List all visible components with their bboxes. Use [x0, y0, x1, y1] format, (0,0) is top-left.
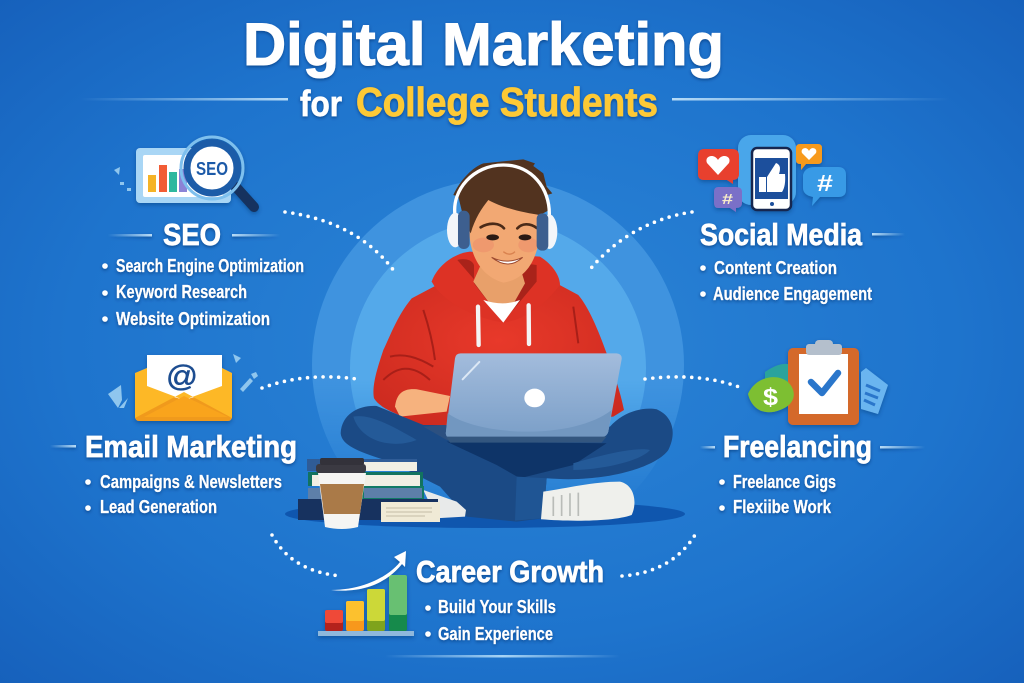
title: for [300, 83, 342, 124]
title: Digital Marketing [243, 11, 724, 78]
section: freelancing: Freelancing [723, 429, 872, 464]
icon: email envelope: @ [166, 360, 198, 393]
arm [395, 389, 450, 417]
drawstrings [478, 305, 529, 345]
section: SEO: Keyword Research [116, 282, 247, 302]
section: career growth: Career Growth [416, 554, 604, 589]
face [469, 199, 541, 283]
section: SEO [102, 217, 304, 329]
section: career growth: Build Your Skills [438, 597, 556, 617]
section: social media: Social Media [700, 217, 863, 252]
section: social media: Audience Engagement [713, 284, 872, 304]
section: email marketing: Lead Generation [100, 497, 217, 517]
shoes [541, 482, 634, 521]
icon: social media phone and bubbles: # [817, 170, 833, 196]
dotted connectors [262, 212, 742, 576]
floor shadow [285, 500, 685, 528]
decorative triangle near SEO [114, 167, 131, 191]
section: social media: Content Creation [714, 258, 837, 278]
icon: growth bar chart [318, 551, 414, 636]
coffee cup [316, 458, 366, 529]
student illustration [341, 159, 673, 522]
section: SEO: Search Engine Optimization [116, 256, 304, 276]
section: SEO: Website Optimization [116, 309, 270, 329]
stack of books [298, 459, 440, 522]
neck and shirt [473, 267, 525, 322]
section: freelancing [700, 429, 925, 517]
icon: social media phone and bubbles: # [722, 191, 734, 208]
icon: freelancing clipboard and money: $ [763, 384, 779, 411]
icon: social media phone and bubbles [698, 135, 846, 212]
section: career growth [416, 554, 604, 644]
section: SEO: SEO [163, 217, 221, 252]
icon: SEO chart and magnifier [136, 137, 254, 207]
section: email marketing [50, 429, 297, 517]
icon: freelancing clipboard and money [748, 340, 888, 425]
title: College Students [356, 79, 658, 125]
hoodie [373, 283, 624, 427]
section: freelancing: Freelance Gigs [733, 472, 836, 492]
icon: SEO chart and magnifier: SEO [196, 159, 228, 179]
glow circles behind student [312, 183, 684, 482]
hood collar [432, 252, 560, 323]
section: email marketing: Campaigns & Newsletters [100, 472, 282, 492]
jeans [341, 406, 673, 522]
section: career growth: Gain Experience [438, 624, 553, 644]
laptop [423, 425, 607, 442]
section: social media [700, 217, 905, 304]
icon: email envelope [135, 355, 232, 421]
section: freelancing: Flexiibe Work [733, 497, 832, 517]
decorative marks near email [108, 354, 258, 408]
section: email marketing: Email Marketing [85, 429, 297, 464]
title [243, 11, 724, 125]
hair [453, 159, 552, 233]
headphones [455, 165, 549, 215]
